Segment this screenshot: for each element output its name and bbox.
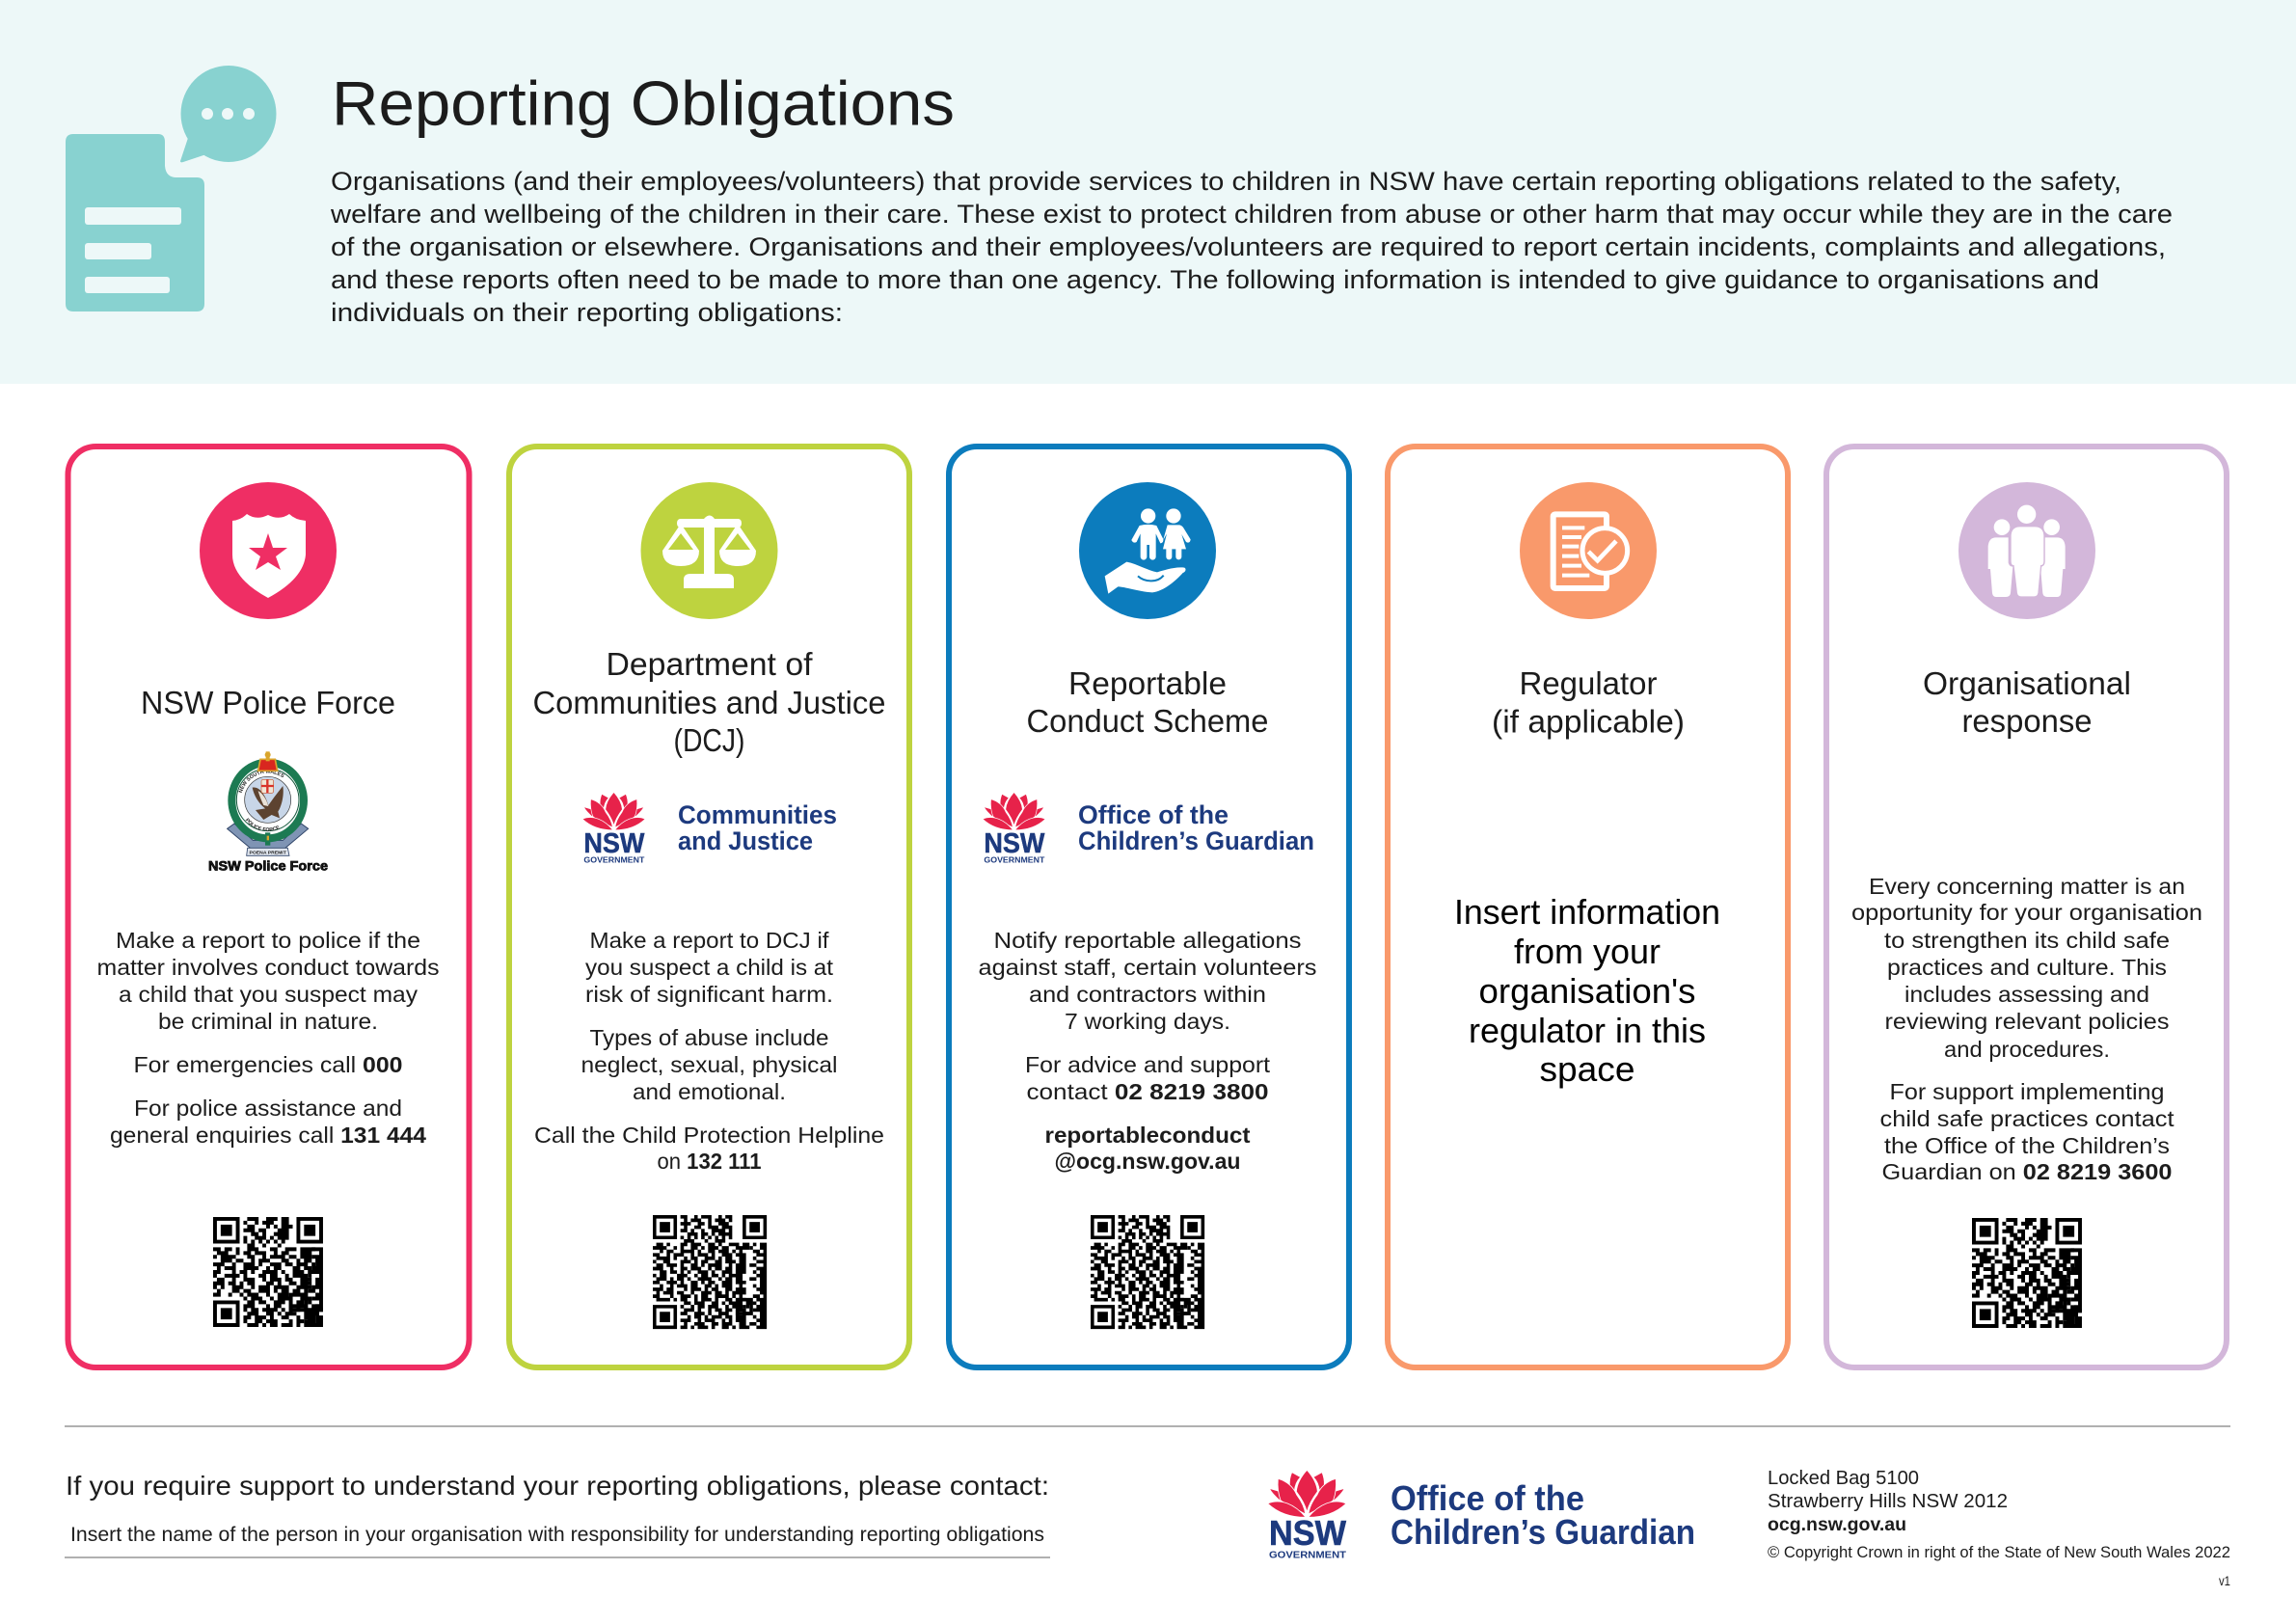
title: Reporting Obligations <box>332 68 955 139</box>
body text: reportableconduct <box>1045 1123 1251 1148</box>
body text: matter involves conduct towards <box>96 955 440 980</box>
body text <box>978 928 1317 1174</box>
logo: Communities and Justice: and Justice <box>678 826 813 855</box>
contact placeholder line: Insert the name of the person in your organisation with responsibility for understanding reporting obligations <box>70 1524 1044 1546</box>
body text: be criminal in nature. <box>158 1009 378 1034</box>
panel: Reportable Conduct Scheme <box>949 447 1349 1367</box>
placeholder text: from your <box>1514 932 1661 971</box>
icon: scales of justice <box>640 482 777 619</box>
body text: opportunity for your organisation <box>1851 900 2202 925</box>
heading: Organisational <box>1923 666 2131 702</box>
QR code <box>1972 1218 2082 1328</box>
logo: Office of the Children's Guardian: GOVERNMENT <box>984 854 1045 864</box>
address block: ocg.nsw.gov.au <box>1768 1514 1906 1535</box>
body text: For police assistance and <box>134 1096 402 1121</box>
icon: document with check mark <box>1520 482 1657 619</box>
logo: Office of the Children's Guardian <box>1268 1470 1695 1560</box>
panel: Regulator <box>1388 447 1788 1367</box>
intro text block: and these reports often need to be made to more than one agency. The following information is intended to give guidance to organisations and <box>331 265 2099 294</box>
body text: risk of significant harm. <box>585 982 833 1007</box>
body text: For support implementing <box>1890 1079 2164 1104</box>
logo: Office of the Children's Guardian: Children’s Guardian <box>1078 826 1314 855</box>
address block: Locked Bag 5100 <box>1768 1467 1919 1489</box>
body text <box>1851 874 2202 1184</box>
intro text block: individuals on their reporting obligations: <box>331 298 843 327</box>
intro text block <box>330 167 2173 327</box>
body text: you suspect a child is at <box>585 955 833 980</box>
intro text block: welfare and wellbeing of the children in their care. These exist to protect children from abuse or other harm that may occur while they are in the care <box>330 200 2173 229</box>
body text: and contractors within <box>1029 982 1266 1007</box>
heading <box>532 647 885 759</box>
icon: document with speech bubble <box>66 66 276 311</box>
heading: Department of <box>606 647 813 683</box>
panel: Organisational response <box>1826 447 2227 1367</box>
heading <box>1492 666 1685 741</box>
body text: For emergencies call 000 <box>133 1052 403 1077</box>
logo: NSW Police crest: POLICE FORCE <box>245 818 280 831</box>
heading: Regulator <box>1520 666 1657 702</box>
heading: NSW Police Force <box>141 686 395 721</box>
body text: Make a report to police if the <box>116 928 420 953</box>
body text: includes assessing and <box>1904 982 2149 1007</box>
body text: practices and culture. This <box>1887 955 2167 980</box>
body text: on 132 111 <box>658 1149 762 1174</box>
panel: NSW Police Force <box>66 444 473 1370</box>
body text: the Office of the Children’s <box>1884 1133 2170 1158</box>
logo: Office of the Children's Guardian: NSW <box>1269 1513 1346 1553</box>
body text: Every concerning matter is an <box>1869 874 2185 899</box>
logo: NSW Police crest: NSW Police Force <box>208 858 329 874</box>
heading <box>1026 666 1269 740</box>
body text: and emotional. <box>633 1079 786 1104</box>
address block: Strawberry Hills NSW 2012 <box>1768 1490 2008 1512</box>
body text: For advice and support <box>1025 1052 1270 1077</box>
logo: Office of the Children's Guardian <box>983 792 1314 864</box>
QR code <box>653 1215 767 1329</box>
icon: children in a hand <box>1079 482 1216 619</box>
QR code <box>213 1217 323 1327</box>
logo: Communities and Justice: Communities <box>678 800 837 829</box>
header band <box>0 0 2296 384</box>
logo: Office of the Children's Guardian: Office of the <box>1078 800 1229 829</box>
logo: NSW Police crest: NEW SOUTH WALES <box>238 771 284 793</box>
body text: contact 02 8219 3800 <box>1026 1079 1269 1104</box>
body text <box>534 928 884 1174</box>
address block: v1 <box>2219 1573 2230 1588</box>
footer <box>65 1426 2230 1588</box>
icon: group of people <box>1958 482 2095 619</box>
body text <box>96 928 440 1148</box>
intro text block: of the organisation or elsewhere. Organisations and their employees/volunteers are required to report certain incidents, complaints and allegations, <box>331 232 2166 261</box>
body text: @ocg.nsw.gov.au <box>1055 1149 1240 1174</box>
body text: Guardian on 02 8219 3600 <box>1882 1159 2172 1184</box>
heading: Communities and Justice <box>532 686 885 721</box>
logo: Communities and Justice: NSW <box>583 828 645 859</box>
heading: (DCJ) <box>673 723 744 759</box>
footer contact prompt: If you require support to understand your reporting obligations, please contact: <box>66 1471 1049 1501</box>
logo: Communities and Justice: GOVERNMENT <box>583 854 645 864</box>
placeholder text: Insert information <box>1454 892 1720 932</box>
placeholder text <box>1454 892 1720 1089</box>
body text: 7 working days. <box>1065 1009 1230 1034</box>
body text: Notify reportable allegations <box>993 928 1302 953</box>
logo: Communities and Justice <box>582 792 837 864</box>
intro text block: Organisations (and their employees/volunteers) that provide services to children in NSW have certain reporting obligations related to the safety, <box>331 167 2121 196</box>
address block: © Copyright Crown in right of the State of New South Wales 2022 <box>1768 1543 2230 1561</box>
heading: (if applicable) <box>1492 704 1685 741</box>
body text: Types of abuse include <box>590 1025 829 1050</box>
body text: Call the Child Protection Helpline <box>534 1123 884 1148</box>
placeholder text: regulator in this <box>1469 1011 1706 1050</box>
body text: and procedures. <box>1944 1037 2110 1062</box>
body text: general enquiries call 131 444 <box>110 1123 426 1148</box>
body text: against staff, certain volunteers <box>978 955 1317 980</box>
icon: police badge <box>200 482 337 619</box>
heading <box>1923 666 2131 740</box>
placeholder text: space <box>1539 1049 1635 1089</box>
panel: Department of Communities and Justice <box>509 447 909 1367</box>
body text: child safe practices contact <box>1880 1106 2174 1131</box>
logo: NSW Police crest <box>208 751 329 874</box>
body text: neglect, sexual, physical <box>581 1052 837 1077</box>
QR code <box>1091 1215 1204 1329</box>
body text: to strengthen its child safe <box>1884 928 2170 953</box>
heading: Reportable <box>1068 666 1227 702</box>
body text: a child that you suspect may <box>119 982 418 1007</box>
body text: reviewing relevant policies <box>1884 1009 2170 1034</box>
logo: Office of the Children's Guardian: NSW <box>984 828 1045 859</box>
logo: Office of the Children's Guardian: Office of the <box>1391 1478 1584 1518</box>
logo: Office of the Children's Guardian: GOVERNMENT <box>1269 1549 1347 1560</box>
body text: Make a report to DCJ if <box>590 928 829 953</box>
placeholder text: organisation's <box>1479 971 1695 1011</box>
heading: Conduct Scheme <box>1026 704 1269 740</box>
logo: Office of the Children's Guardian: Children’s Guardian <box>1391 1512 1695 1552</box>
logo: NSW Police crest: POENA PREMIT <box>249 850 286 855</box>
heading: response <box>1961 704 2093 740</box>
address block <box>1768 1467 2230 1588</box>
